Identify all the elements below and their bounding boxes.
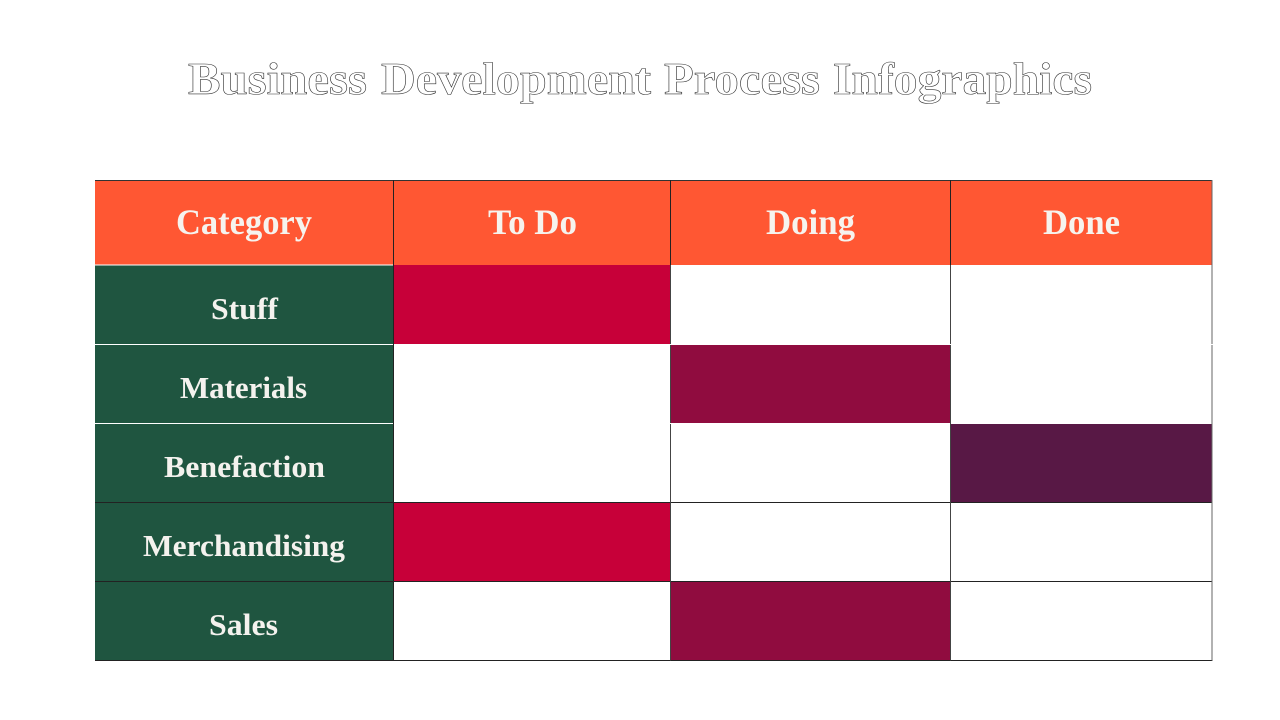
status cell: Merchandising to do xyxy=(394,503,670,581)
row label: Benefaction: Benefaction xyxy=(164,449,325,484)
header: To Do: To Do xyxy=(488,202,577,242)
status cell: Sales doing xyxy=(670,582,950,660)
header row xyxy=(95,180,1212,265)
title: Process xyxy=(664,53,820,104)
header: Doing: Doing xyxy=(766,202,855,242)
title: Business xyxy=(188,53,367,104)
category column xyxy=(95,265,394,660)
row label: Materials: Materials xyxy=(180,370,307,405)
title: Development xyxy=(381,53,652,104)
status cell: Benefaction done xyxy=(950,424,1212,502)
row label: Sales: Sales xyxy=(209,607,278,642)
title: Infographics xyxy=(833,53,1092,104)
header: Category: Category xyxy=(176,202,312,242)
row label: Merchandising: Merchandising xyxy=(143,528,346,563)
header: Done: Done xyxy=(1043,202,1120,242)
status cell: Materials doing xyxy=(670,345,950,423)
table xyxy=(95,180,1212,660)
title xyxy=(188,53,1092,104)
row label: Stuff: Stuff xyxy=(211,291,279,326)
status cell: Stuff to do xyxy=(394,265,670,344)
